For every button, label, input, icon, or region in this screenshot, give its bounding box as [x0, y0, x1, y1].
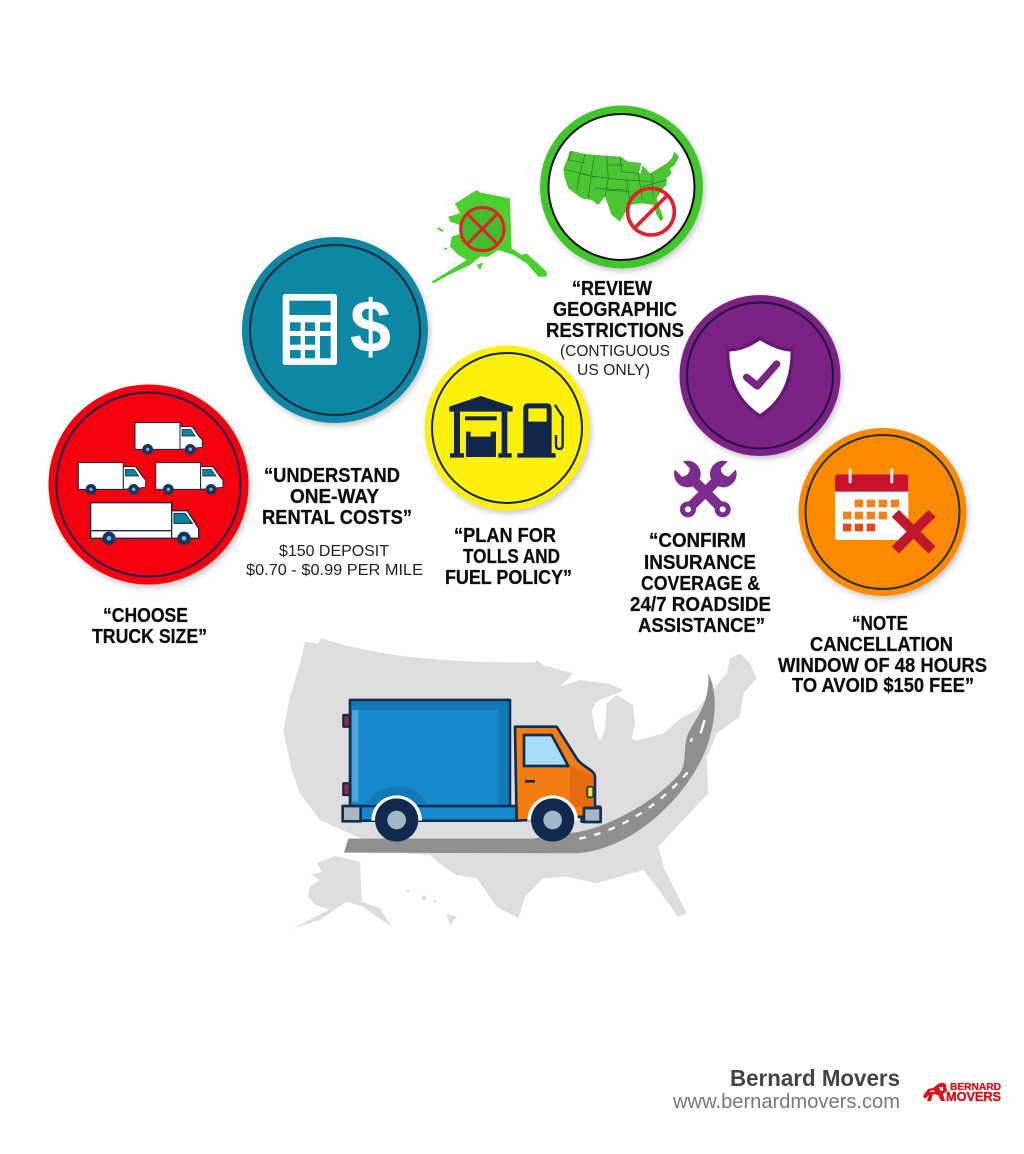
icon: contiguous US map with prohibition sign: [563, 151, 679, 235]
label: note cancellation window: “NOTE: [852, 613, 908, 635]
footer: Bernard Movers logo: BERNARD: [950, 1082, 1001, 1093]
footer: brand name and URL: www.bernardmovers.com: [672, 1091, 900, 1113]
label: review geographic restrictions: GEOGRAPHIC: [553, 299, 677, 321]
label: cost figures: [246, 543, 423, 579]
label: review geographic restrictions: “REVIEW: [572, 278, 652, 300]
footer: Bernard Movers logo: MOVERS: [946, 1089, 1001, 1104]
label: cost figures: $0.70 - $0.99 PER MILE: [246, 562, 423, 579]
yellow circle badge: [424, 346, 590, 510]
label: review geographic restrictions: [546, 278, 684, 342]
teal circle badge: [242, 237, 428, 423]
delivery truck: [343, 700, 601, 842]
footer: Bernard Movers logo: [923, 1082, 1001, 1104]
label: choose truck size: [92, 605, 207, 648]
icon: crossed wrenches: [669, 456, 741, 524]
label: choose truck size: “CHOOSE: [103, 605, 188, 627]
road curve: [344, 673, 715, 853]
label: understand one-way rental costs: “UNDERSTAND: [264, 465, 400, 487]
label: contiguous US only: (CONTIGUOUS: [560, 343, 670, 360]
purple circle badge: [680, 295, 840, 456]
label: understand one-way rental costs: ONE-WAY: [290, 486, 380, 508]
panel: tolls and fuel: [424, 346, 590, 589]
label: plan for tolls and fuel policy: [445, 525, 572, 589]
label: choose truck size: TRUCK SIZE”: [92, 626, 207, 648]
label: note cancellation window: CANCELLATION: [810, 634, 953, 656]
label: understand one-way rental costs: [262, 465, 412, 529]
orange circle badge: [798, 428, 966, 596]
panel: geographic restrictions: [432, 106, 703, 379]
label: understand one-way rental costs: RENTAL COSTS”: [262, 507, 412, 529]
red circle badge: [48, 384, 248, 584]
label: plan for tolls and fuel policy: “PLAN FOR: [454, 525, 557, 547]
label: confirm insurance coverage: INSURANCE: [644, 552, 756, 574]
background map: gray USA: [283, 638, 757, 928]
icon: four trucks: [78, 423, 223, 545]
label: review geographic restrictions: RESTRICTIONS: [546, 320, 684, 342]
icon: calendar with cross: [835, 468, 932, 550]
icon: dollar sign: $: [350, 285, 391, 368]
panel: choose truck size: [48, 384, 248, 648]
label: confirm insurance coverage: “CONFIRM: [649, 530, 746, 552]
label: confirm insurance coverage: 24/7 ROADSIDE: [630, 594, 771, 616]
label: plan for tolls and fuel policy: TOLLS AND: [463, 546, 560, 568]
icon: calculator: [283, 294, 337, 365]
label: note cancellation window: TO AVOID $150 FEE”: [792, 675, 974, 697]
icon: Alaska with red cross: [432, 190, 547, 283]
label: cost figures: $150 DEPOSIT: [279, 543, 389, 560]
label: note cancellation window: [778, 613, 987, 697]
label: confirm insurance coverage: COVERAGE &: [641, 573, 760, 595]
panel: one-way rental costs: [242, 237, 428, 579]
label: note cancellation window: WINDOW OF 48 HOURS: [778, 655, 987, 677]
icon: shield with check: [728, 338, 792, 416]
icon: toll booth and fuel pump: [449, 396, 563, 458]
label: contiguous US only: [560, 343, 670, 379]
footer: brand name and URL: Bernard Movers: [730, 1065, 900, 1091]
green circle badge: [540, 106, 703, 268]
panel: cancellation window: [778, 428, 987, 697]
label: confirm insurance coverage: ASSISTANCE”: [638, 615, 765, 637]
footer: brand name and URL: [672, 1065, 900, 1113]
label: plan for tolls and fuel policy: FUEL POLICY”: [445, 567, 572, 589]
label: confirm insurance coverage: [630, 530, 771, 637]
label: contiguous US only: US ONLY): [577, 362, 650, 379]
panel: insurance and roadside assistance: [630, 295, 840, 637]
